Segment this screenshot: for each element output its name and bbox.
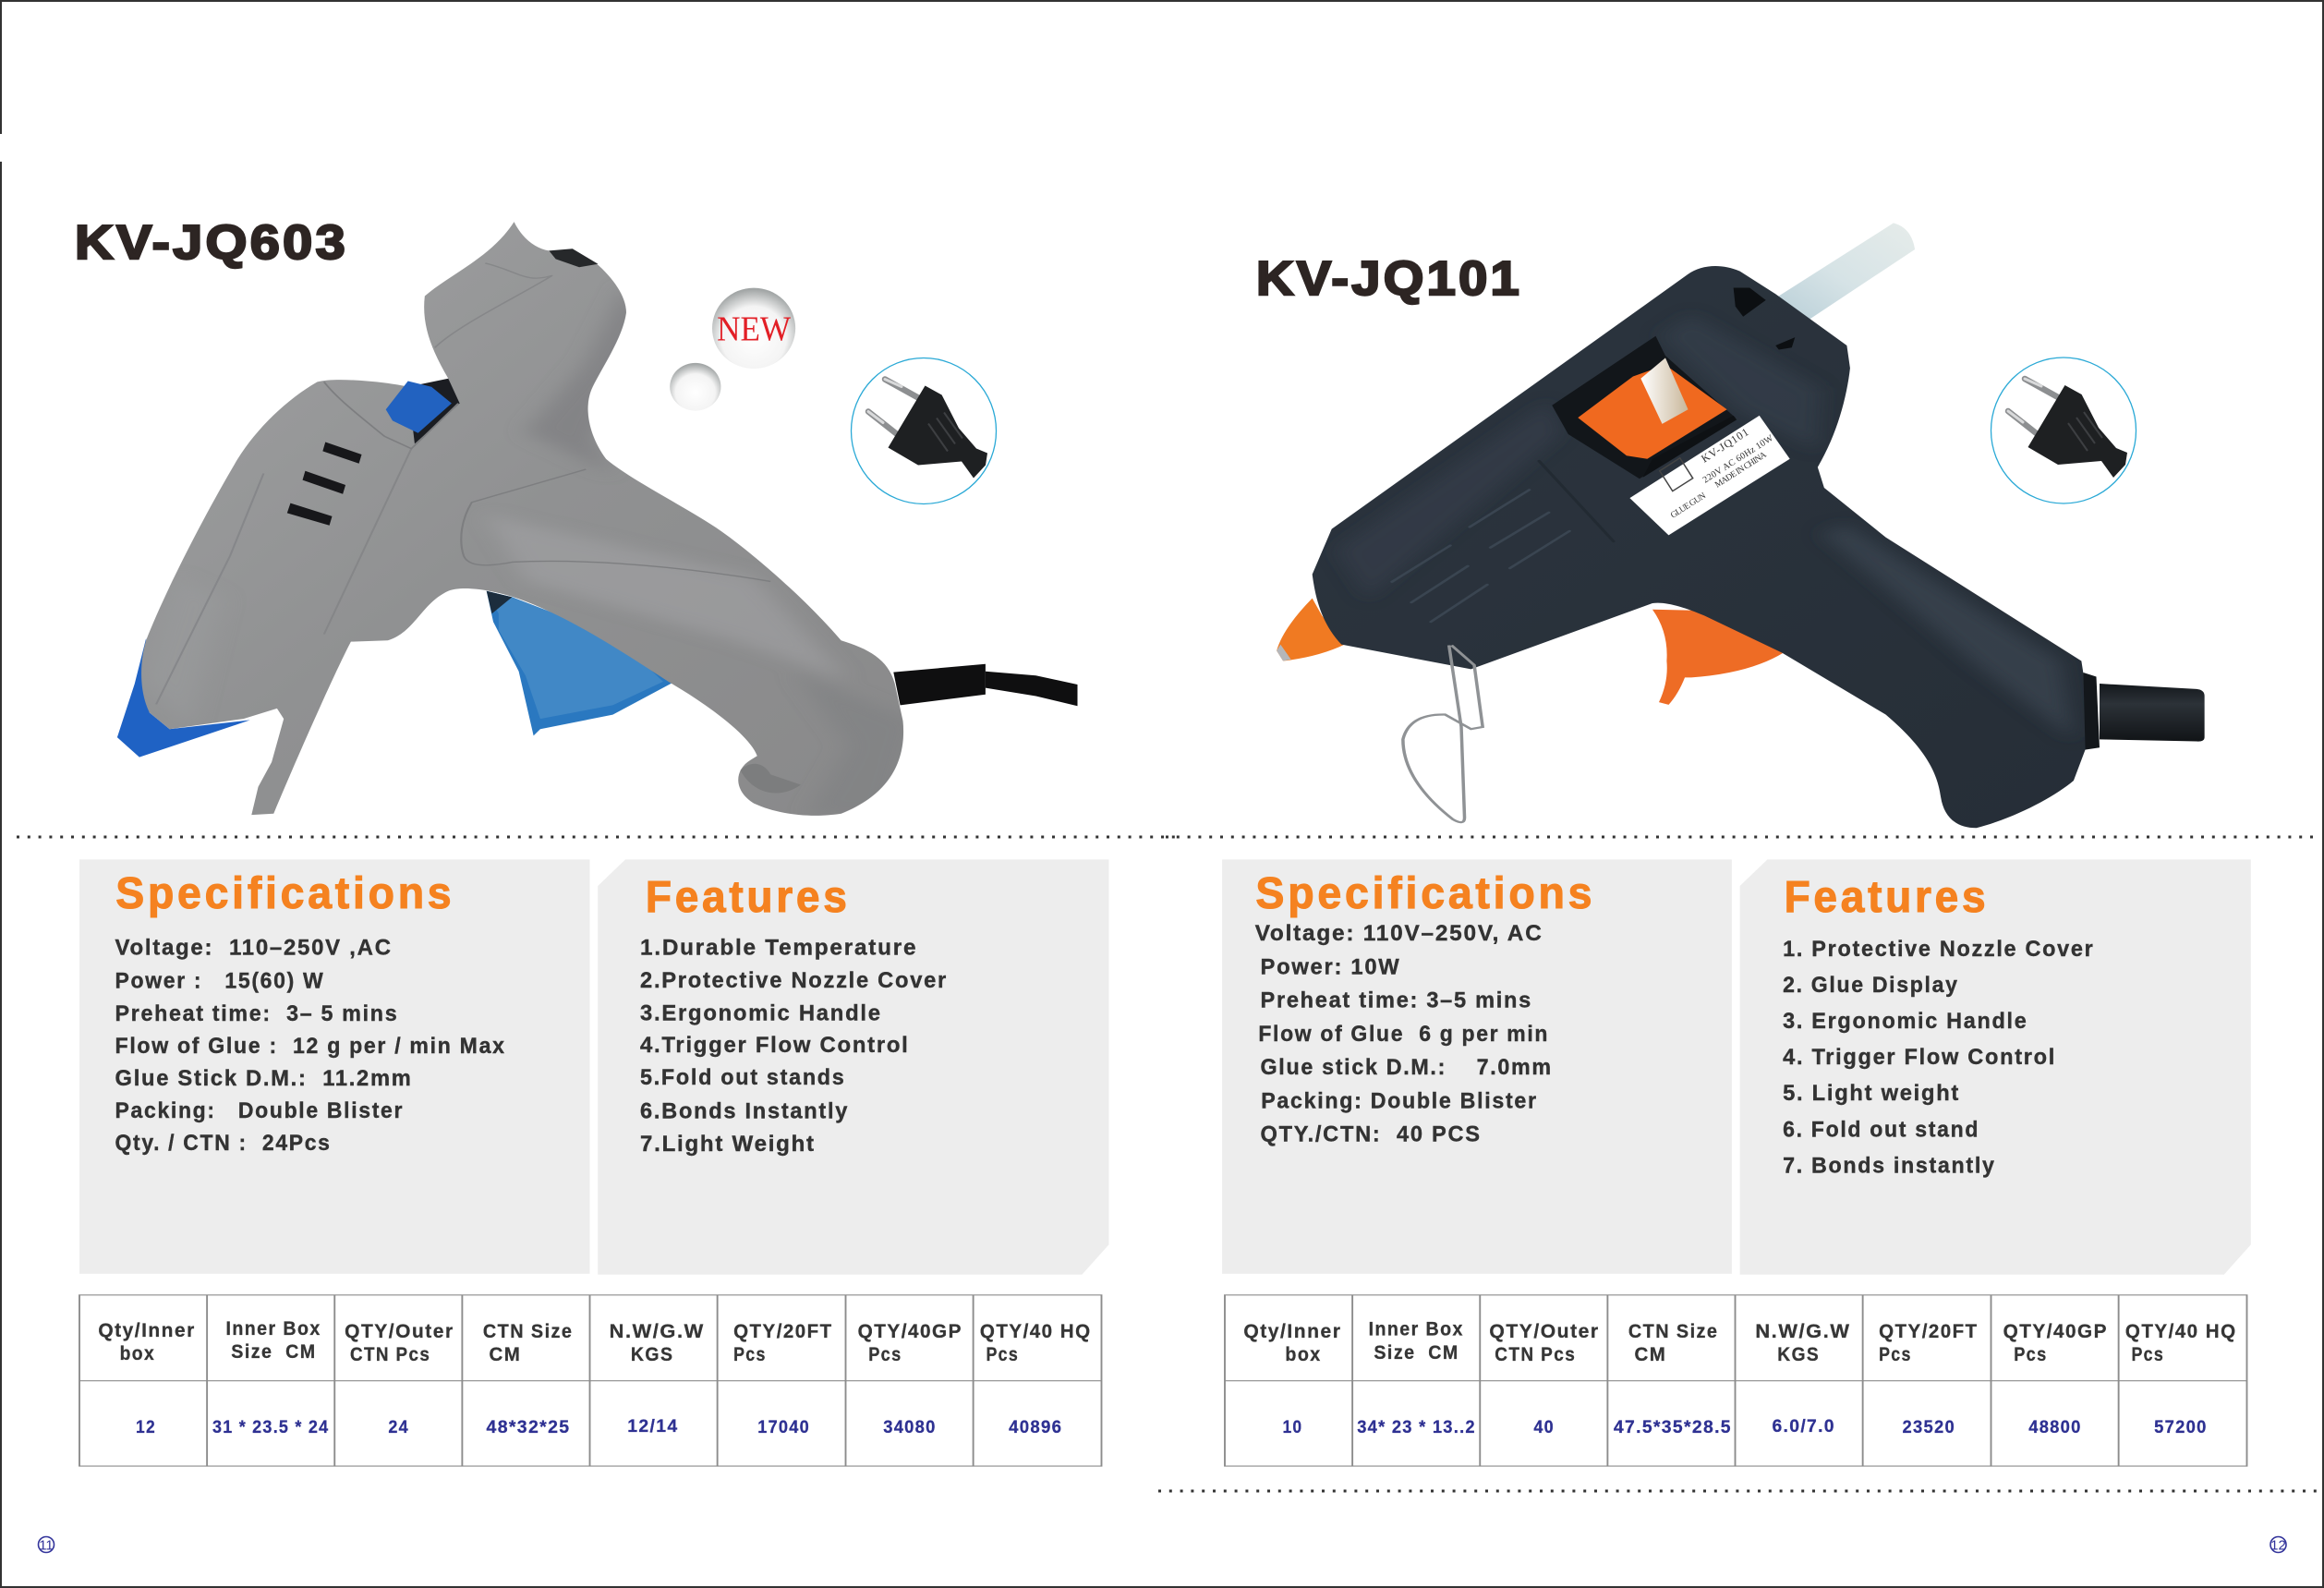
heading: Specifications: Specifications — [115, 867, 454, 918]
features list: 5. Light weight — [1783, 1080, 1960, 1105]
table: packing data KV-JQ603: 12 — [136, 1417, 156, 1436]
table: packing data KV-JQ603: CTN Pcs — [350, 1344, 430, 1365]
table: packing data KV-JQ603 — [79, 1295, 1101, 1466]
table: packing data KV-JQ603: 17040 — [757, 1417, 810, 1436]
table: packing data KV-JQ603: CM — [489, 1344, 521, 1365]
vent slots — [287, 442, 362, 526]
rating label text: 220V AC 60Hz 10W — [1701, 433, 1775, 486]
NEW bubble badge — [670, 288, 795, 411]
table: packing data KV-JQ603: Pcs — [733, 1344, 767, 1365]
small bubble — [670, 363, 720, 411]
specification list: Power: 10W — [1261, 954, 1400, 979]
table: packing data KV-JQ101: QTY/40 HQ — [2125, 1321, 2237, 1342]
page number 12: 12 — [2270, 1537, 2286, 1554]
features list: 2. Glue Display — [1783, 972, 1959, 997]
features list: 1. Protective Nozzle Cover — [1783, 936, 2094, 961]
glue inlet — [1734, 288, 1795, 349]
heading: Features: Features — [646, 872, 851, 922]
features list — [640, 935, 948, 1156]
power plug callout: right — [1991, 358, 2136, 503]
table: packing data KV-JQ101: QTY/40GP — [2003, 1321, 2108, 1342]
nozzle tip — [1277, 599, 1345, 661]
table: packing data KV-JQ101: CTN Size — [1628, 1321, 1718, 1342]
table: packing data KV-JQ101: CM — [1634, 1344, 1666, 1365]
table: packing data KV-JQ101: 6.0/7.0 — [1772, 1416, 1835, 1436]
specification list: Preheat time: 3–5 mins — [1261, 988, 1532, 1012]
table: packing data KV-JQ101: Inner Box — [1369, 1319, 1464, 1340]
heading: Specifications: Specifications — [1255, 867, 1595, 918]
product photo: black glue gun KV-JQ101 — [1277, 223, 2205, 828]
features list: 3.Ergonomic Handle — [640, 1000, 882, 1024]
features list: 6. Fold out stand — [1783, 1117, 1979, 1142]
model name KV-JQ603: KV-JQ603 — [75, 216, 348, 270]
grey body — [141, 222, 903, 816]
table: packing data KV-JQ603: QTY/40GP — [858, 1321, 962, 1342]
features list: 4.Trigger Flow Control — [640, 1032, 910, 1057]
panel: features — [1740, 859, 2251, 1275]
features list: 7.Light Weight — [640, 1131, 816, 1156]
product photo: grey glue gun KV-JQ603 — [117, 222, 1077, 816]
raised ridge and handle highlight — [1335, 315, 2074, 739]
table: packing data KV-JQ603: 31 * 23.5 * 24 — [212, 1417, 329, 1436]
plug pins — [2008, 379, 2058, 435]
panel: features — [598, 859, 1108, 1275]
table: packing data KV-JQ101: box — [1285, 1344, 1322, 1365]
heading: Features: Features — [1785, 872, 1989, 922]
specification list: Voltage: 110V–250V, AC — [1255, 920, 1543, 945]
specification list: Voltage: 110–250V ,AC — [115, 935, 393, 960]
dotted divider: lower — [1158, 1489, 2320, 1493]
table: packing data KV-JQ603: 48*32*25 — [487, 1417, 570, 1436]
table: packing data KV-JQ101: Pcs — [2131, 1344, 2164, 1365]
specification list: Power : 15(60) W — [115, 968, 324, 993]
table: packing data KV-JQ101: KGS — [1777, 1344, 1820, 1365]
table: packing data KV-JQ603: 34080 — [883, 1417, 937, 1436]
features list: 3. Ergonomic Handle — [1783, 1008, 2027, 1033]
features list: 5.Fold out stands — [640, 1064, 846, 1089]
table: packing data KV-JQ101: N.W/G.W — [1755, 1321, 1851, 1342]
glue in window — [1640, 358, 1689, 424]
features list: 1.Durable Temperature — [640, 935, 917, 960]
table: packing data KV-JQ101: 57200 — [2154, 1417, 2208, 1436]
orange roller — [1578, 365, 1727, 459]
NEW label: NEW — [717, 309, 791, 349]
table: packing data KV-JQ603: 12/14 — [627, 1416, 678, 1436]
specification list — [115, 935, 506, 1155]
plug body — [2028, 385, 2127, 478]
circle — [852, 358, 996, 504]
rating label text — [1660, 426, 1775, 521]
specification list — [1255, 920, 1553, 1146]
specification list: Glue stick D.M.: 7.0mm — [1261, 1054, 1553, 1079]
large bubble — [712, 288, 795, 369]
plug body — [889, 386, 987, 479]
table: packing data KV-JQ101: Pcs — [1879, 1344, 1912, 1365]
power cord — [893, 664, 1077, 706]
rating label text: KV-JQ101 — [1699, 426, 1751, 466]
blue glue feed in notch — [386, 379, 460, 443]
specification list: Preheat time: 3– 5 mins — [115, 1000, 398, 1025]
table: packing data KV-JQ101: 10 — [1283, 1417, 1302, 1436]
table: packing data KV-JQ603: QTY/20FT — [733, 1321, 833, 1342]
blue nozzle — [117, 638, 250, 758]
table: packing data KV-JQ603: Size CM — [231, 1341, 317, 1363]
table: packing data KV-JQ101: CTN Pcs — [1495, 1344, 1576, 1365]
features list: 7. Bonds instantly — [1783, 1153, 1996, 1178]
top opening — [549, 249, 598, 267]
cord strain relief — [2083, 673, 2205, 750]
table: packing data KV-JQ603: Inner Box — [225, 1318, 321, 1339]
table: packing data KV-JQ101 — [1225, 1295, 2246, 1466]
dotted divider: upper — [17, 835, 2320, 839]
table: packing data KV-JQ603: CTN Size — [483, 1321, 573, 1342]
table: packing data KV-JQ603: QTY/Outer — [345, 1321, 454, 1342]
specification list: Glue Stick D.M.: 11.2mm — [115, 1065, 413, 1090]
table: packing data KV-JQ101: QTY/20FT — [1879, 1321, 1979, 1342]
specification list: Packing: Double Blister — [1261, 1088, 1538, 1113]
features list: 4. Trigger Flow Control — [1783, 1044, 2056, 1069]
table: packing data KV-JQ603: Qty/Inner — [98, 1320, 196, 1341]
page number 11: 11 — [39, 1537, 54, 1554]
glue stick — [1743, 223, 1915, 342]
features list: 2.Protective Nozzle Cover — [640, 967, 948, 992]
model name KV-JQ101: KV-JQ101 — [1256, 252, 1522, 306]
features list: 6.Bonds Instantly — [640, 1098, 849, 1123]
specification list: Packing: Double Blister — [115, 1097, 404, 1122]
table: packing data KV-JQ101: 48800 — [2028, 1417, 2082, 1436]
table: packing data KV-JQ603: QTY/40 HQ — [980, 1321, 1092, 1342]
soft body shading — [504, 293, 903, 816]
table: packing data KV-JQ603: Pcs — [986, 1344, 1019, 1365]
power plug callout: left — [852, 358, 996, 504]
table: packing data KV-JQ101: 40 — [1533, 1417, 1555, 1436]
table: packing data KV-JQ603: box — [120, 1343, 155, 1364]
window opening — [1552, 336, 1737, 479]
table: packing data KV-JQ101: 47.5*35*28.5 — [1614, 1417, 1732, 1436]
base recess — [741, 764, 801, 793]
table: packing data KV-JQ101: QTY/Outer — [1489, 1321, 1600, 1342]
left product info panels — [79, 859, 1108, 1466]
moulded contours — [156, 263, 770, 704]
circle — [1991, 358, 2136, 503]
right product info panels — [1222, 859, 2251, 1466]
white rating label — [1629, 416, 1790, 535]
blue trigger — [487, 591, 674, 735]
specification list: Flow of Glue : 12 g per / min Max — [115, 1033, 506, 1058]
rating label text: GLUE GUN — [1669, 491, 1708, 521]
fold out wire stand — [1403, 646, 1483, 822]
specification list: QTY./CTN: 40 PCS — [1261, 1121, 1482, 1146]
table: packing data KV-JQ101: Qty/Inner — [1243, 1321, 1341, 1342]
specification list: Qty. / CTN : 24Pcs — [115, 1130, 332, 1155]
table: packing data KV-JQ603: 24 — [388, 1417, 409, 1436]
plug pins — [868, 379, 918, 436]
grip ridges — [1392, 461, 1614, 622]
panel: specifications — [1222, 859, 1732, 1274]
table: packing data KV-JQ603: Pcs — [868, 1344, 902, 1365]
panel: specifications — [79, 859, 590, 1274]
black body — [1313, 266, 2086, 828]
orange trigger — [1652, 610, 1784, 705]
table: packing data KV-JQ603: N.W/G.W — [610, 1321, 705, 1342]
table: packing data KV-JQ101: Size CM — [1374, 1342, 1459, 1364]
table: packing data KV-JQ101: 23520 — [1903, 1417, 1955, 1436]
features list — [1783, 936, 2094, 1178]
table: packing data KV-JQ101: Pcs — [2014, 1344, 2048, 1365]
rating label text: MADE IN CHINA — [1713, 451, 1769, 491]
table: packing data KV-JQ603: KGS — [631, 1344, 673, 1365]
table: packing data KV-JQ101: 34* 23 * 13..2 — [1357, 1417, 1476, 1436]
specification list: Flow of Glue 6 g per min — [1258, 1021, 1549, 1046]
table: packing data KV-JQ603: 40896 — [1009, 1417, 1062, 1436]
